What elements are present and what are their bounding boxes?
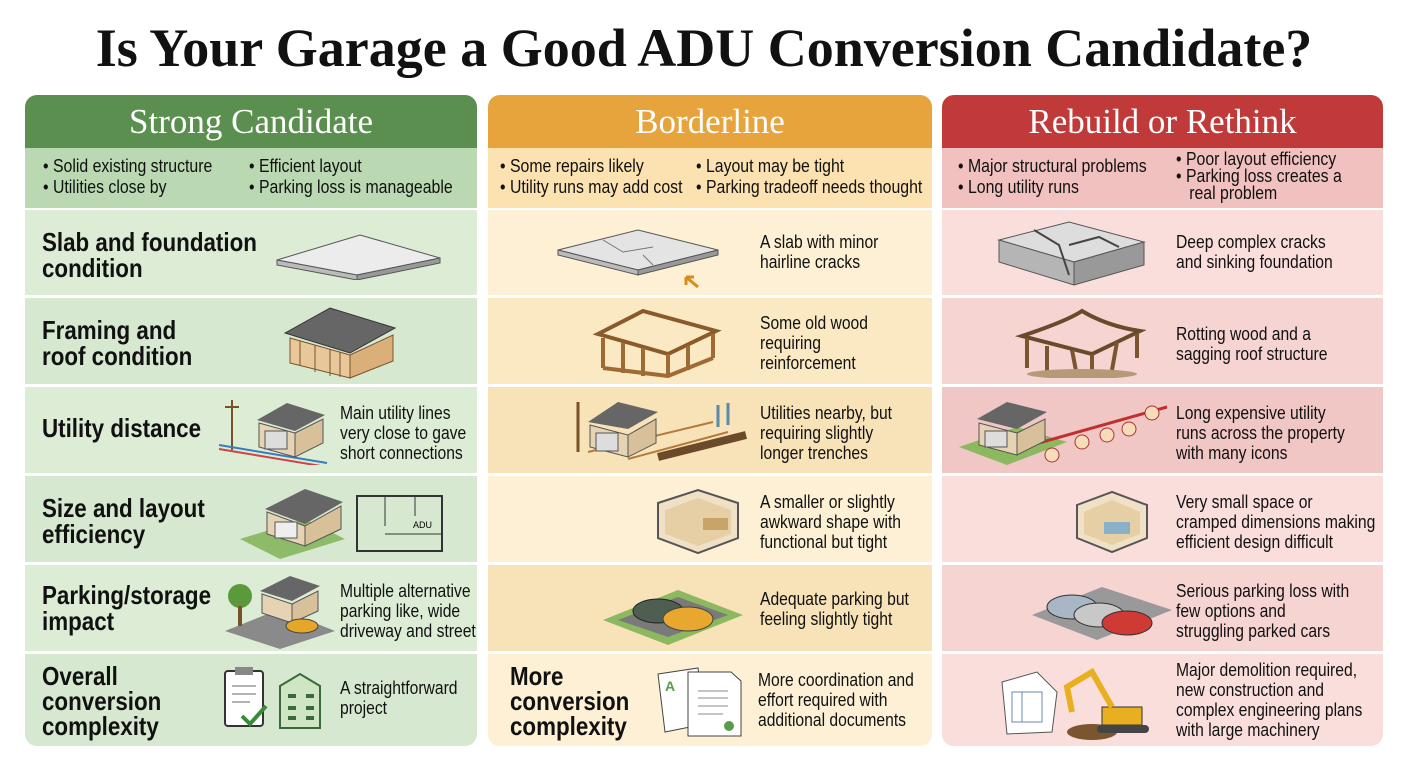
header: strong candidate: Strong Candidate [129,102,373,141]
row: parking [25,565,477,651]
icon: sagging frame [1015,308,1147,378]
row: old wood: reinforcement [760,353,856,373]
row: more complexity [488,654,932,746]
icon: house, tree, car [225,576,335,649]
icon: plans and excavator [1002,668,1149,740]
row: complexity: Overall [42,661,118,691]
row: serious parking loss: Serious parking loss with [1176,581,1349,601]
icon: slab [276,234,440,280]
bullets: rebuild: • Long utility runs [958,177,1079,197]
row: small shape: functional but tight [760,532,887,552]
row: slab: Slab and foundation [42,227,257,257]
bullets: strong [25,148,477,208]
row: major demolition: Major demolition required, [1176,660,1357,680]
row: complexity [25,654,477,746]
header: borderline: Borderline [635,102,785,141]
row: complexity: A straightforward [340,678,458,698]
row: more complexity: More coordination and [758,670,914,690]
row: framing [25,298,477,384]
row: complexity: conversion [42,686,161,716]
row: size layout: Size and layout [42,493,205,523]
bullets: borderline: • Parking tradeoff needs thought [696,177,922,197]
row: parking: parking like, wide [340,601,460,621]
row: deep cracks [942,210,1383,295]
bullets: rebuild: • Major structural problems [958,156,1147,176]
row: slab: condition [42,253,143,283]
row: long utility runs: Long expensive utility [1176,403,1326,423]
row: very small space [942,476,1383,562]
icon: three cars [1032,587,1172,640]
row: old wood: Some old wood [760,313,868,333]
bullets: rebuild: real problem [1189,183,1277,203]
row: utilities trenches: Utilities nearby, but [760,403,892,423]
row: parking: Multiple alternative [340,581,471,601]
row: serious parking loss: few options and [1176,601,1286,621]
row: very small space: efficient design difficult [1176,532,1333,552]
icon: small room [1076,490,1148,554]
row: more complexity: complexity [510,711,627,741]
row: major demolition: complex engineering plans [1176,700,1362,720]
bullets: rebuild: • Parking loss creates a [1176,166,1342,186]
row: slab [25,210,477,295]
row: small shape [488,476,932,562]
icon: garage and floor plan: ADU [413,520,432,530]
row: parking tight: Adequate parking but [760,589,909,609]
icon: house with utilities [218,400,328,465]
bullets: borderline: • Utility runs may add cost [500,177,682,197]
row: serious parking loss: struggling parked cars [1176,621,1330,641]
row: very small space: Very small space or [1176,492,1313,512]
header: rebuild: Rebuild or Rethink [1028,102,1297,141]
icon: house with trenches [576,402,747,461]
row: serious parking loss [942,565,1383,651]
row: major demolition: with large machinery [1176,720,1320,740]
row: more complexity: conversion [510,686,629,716]
header: rebuild [942,95,1383,148]
row: parking tight [488,565,932,651]
icon: garage and floor plan [240,489,443,559]
row: utilities trenches: longer trenches [760,443,868,463]
header: strong candidate [25,95,477,148]
bullets: strong: • Solid existing structure [43,156,212,176]
icon: room cutaway [657,489,739,554]
row: old wood: requiring [760,333,821,353]
row: slab minor cracks [488,210,932,295]
icon: broken slab [997,222,1146,286]
row: utility distance: very close to gave [340,423,466,443]
icon: clipboard and building [224,667,321,729]
row: small shape: A smaller or slightly [760,492,895,512]
row: more complexity: More [510,661,563,691]
icon: house with long red utility line [959,402,1168,465]
row: very small space: cramped dimensions making [1176,512,1375,532]
row: utility distance: Utility distance [42,413,201,443]
row: slab minor cracks: hairline cracks [760,252,860,272]
row: utility distance: Main utility lines [340,403,451,423]
panel: rebuild or rethink [942,95,1383,746]
row: old wood [488,298,932,384]
row: utility distance: short connections [340,443,463,463]
row: rotting wood [942,298,1383,384]
icon: two cars [603,590,743,645]
row: long utility runs: with many icons [1176,443,1287,463]
row: parking: driveway and street [340,621,476,641]
row: complexity: complexity [42,711,159,741]
panel: strong candidate [25,95,477,746]
row: long utility runs [942,387,1383,473]
title: Is Your Garage a Good ADU Conversion Candidate? [96,18,1312,78]
row: more complexity: effort required with [758,690,887,710]
row: rotting wood: sagging roof structure [1176,344,1327,364]
row: framing: Framing and [42,315,176,345]
row: parking: impact [42,606,114,636]
row: parking: Parking/storage [42,580,211,610]
bullets: strong: • Utilities close by [43,177,167,197]
row: major demolition: new construction and [1176,680,1324,700]
row: framing: roof condition [42,341,192,371]
row: slab minor cracks: A slab with minor [760,232,878,252]
row: more complexity: additional documents [758,710,906,730]
row: major demolition [942,654,1383,746]
icon: documents [657,667,742,736]
bullets: borderline: • Layout may be tight [696,156,844,176]
row: utilities trenches: requiring slightly [760,423,873,443]
icon: cracked slab [558,230,718,288]
icon: documents: A [665,678,675,694]
row: long utility runs: runs across the property [1176,423,1345,443]
row: size layout [25,476,477,562]
icon: wood frame [592,308,722,378]
bullets: strong: • Efficient layout [249,156,362,176]
icon: framed garage [284,308,396,379]
row: size layout: efficiency [42,519,145,549]
row: parking tight: feeling slightly tight [760,609,892,629]
row: deep cracks: Deep complex cracks [1176,232,1326,252]
row: utility distance [25,387,477,473]
row: rotting wood: Rotting wood and a [1176,324,1311,344]
header: borderline [488,95,932,148]
bullets: rebuild: • Poor layout efficiency [1176,149,1336,169]
bullets: rebuild [942,148,1383,208]
row: utilities trenches [488,387,932,473]
bullets: borderline [488,148,932,208]
row: small shape: awkward shape with [760,512,901,532]
bullets: borderline: • Some repairs likely [500,156,644,176]
row: complexity: project [340,698,387,718]
row: deep cracks: and sinking foundation [1176,252,1333,272]
bullets: strong: • Parking loss is manageable [249,177,453,197]
panel: borderline [488,95,932,746]
